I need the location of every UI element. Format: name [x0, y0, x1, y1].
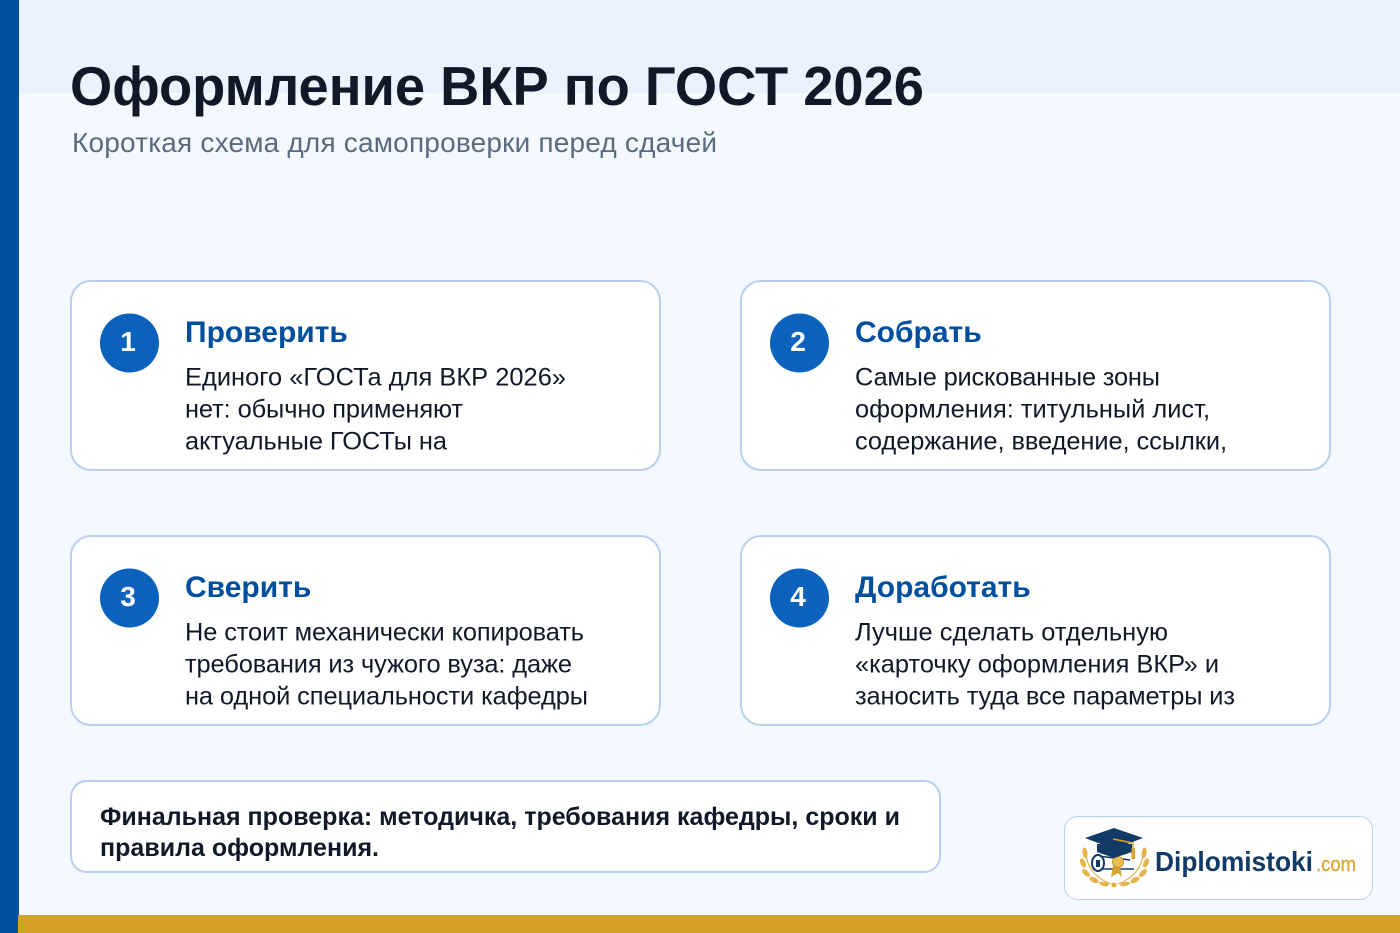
body 1: нет: обычно применяют: [185, 396, 463, 424]
body 3: Не стоит механически копировать: [185, 618, 584, 646]
heading 1: Проверить: [185, 316, 348, 349]
final check text: [100, 803, 900, 862]
body 1: [185, 364, 566, 456]
badge 4: [770, 568, 829, 628]
icon: graduation cap with laurel: [1079, 828, 1150, 888]
logo wordmark: Diplomistoki: [1155, 846, 1313, 877]
header band: [18, 0, 1400, 93]
panel: final check: [71, 781, 940, 872]
logo domain: .com: [1316, 854, 1356, 876]
badge 2: 2: [790, 326, 806, 357]
panel: step 3: [71, 536, 660, 725]
body 4: Лучше сделать отдельную: [855, 618, 1168, 646]
body 1: актуальные ГОСТы на: [185, 428, 448, 456]
badge 1: 1: [120, 326, 136, 357]
body 2: [855, 364, 1227, 456]
body 2: Самые рискованные зоны: [855, 364, 1160, 392]
body 2: оформления: титульный лист,: [855, 396, 1210, 424]
panel: step 4: [741, 536, 1330, 725]
body 4: «карточку оформления ВКР» и: [855, 650, 1219, 678]
body 1: Единого «ГОСТа для ВКР 2026»: [185, 364, 566, 392]
subtitle: Короткая схема для самопроверки перед сдачей: [72, 127, 717, 158]
panel: step 1: [71, 281, 660, 470]
body 4: [855, 618, 1235, 710]
left accent bar: [0, 0, 19, 933]
heading 4: Доработать: [855, 571, 1031, 604]
final check text: правила оформления.: [100, 834, 379, 862]
badge 3: [100, 568, 159, 628]
panel: step 2: [741, 281, 1330, 470]
body 3: требования из чужого вуза: даже: [185, 650, 572, 678]
badge 2: [770, 314, 829, 372]
title: Оформление ВКР по ГОСТ 2026: [70, 56, 924, 117]
heading 2: Собрать: [855, 316, 982, 349]
laurel: [1086, 852, 1143, 884]
heading 3: Сверить: [185, 571, 311, 604]
body 3: на одной специальности кафедры: [185, 682, 588, 710]
badge 3: 3: [120, 581, 136, 612]
diploma: [1098, 856, 1134, 869]
body 3: [185, 618, 588, 710]
seal: [1111, 866, 1122, 877]
badge 4: 4: [790, 581, 806, 612]
logo card: [1064, 816, 1372, 900]
bottom gold bar: [18, 915, 1400, 933]
body 2: содержание, введение, ссылки,: [855, 428, 1227, 456]
badge 1: [100, 314, 159, 372]
body 4: заносить туда все параметры из: [855, 682, 1235, 710]
final check text: Финальная проверка: методичка, требования кафедры, сроки и: [100, 803, 900, 831]
cap: [1097, 844, 1132, 858]
